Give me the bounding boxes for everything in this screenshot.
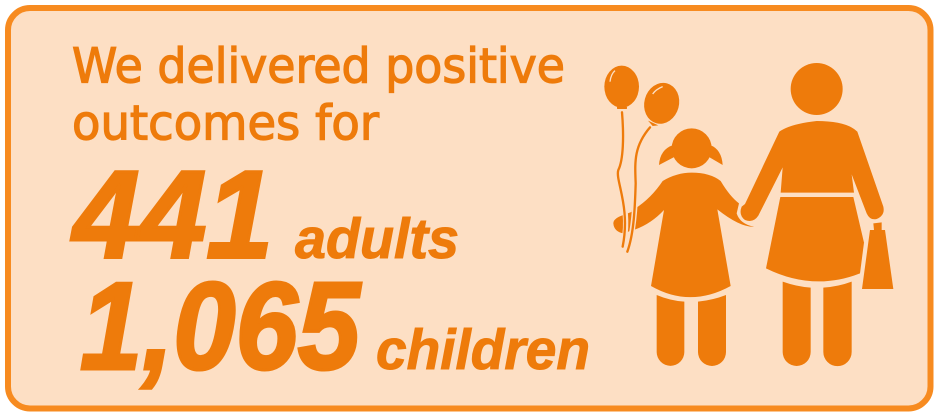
stat: 441 adults bbox=[70, 147, 459, 285]
heading: We delivered positive bbox=[72, 39, 565, 95]
stat: 1,065 children: 1,065 bbox=[80, 258, 362, 396]
stat: 1,065 children: children bbox=[376, 318, 590, 382]
heading: outcomes for bbox=[72, 95, 379, 151]
icon: balloons bbox=[604, 66, 684, 252]
stat: 441 adults: 441 bbox=[70, 147, 273, 285]
stat: 1,065 children bbox=[80, 258, 590, 396]
icon: adult figure bbox=[741, 63, 884, 366]
heading bbox=[72, 39, 565, 151]
icon: adult and child with balloons bbox=[604, 63, 893, 366]
stat: 441 adults: adults bbox=[295, 207, 459, 271]
icon: shopping bag bbox=[862, 222, 893, 289]
icon: child figure bbox=[613, 128, 754, 366]
